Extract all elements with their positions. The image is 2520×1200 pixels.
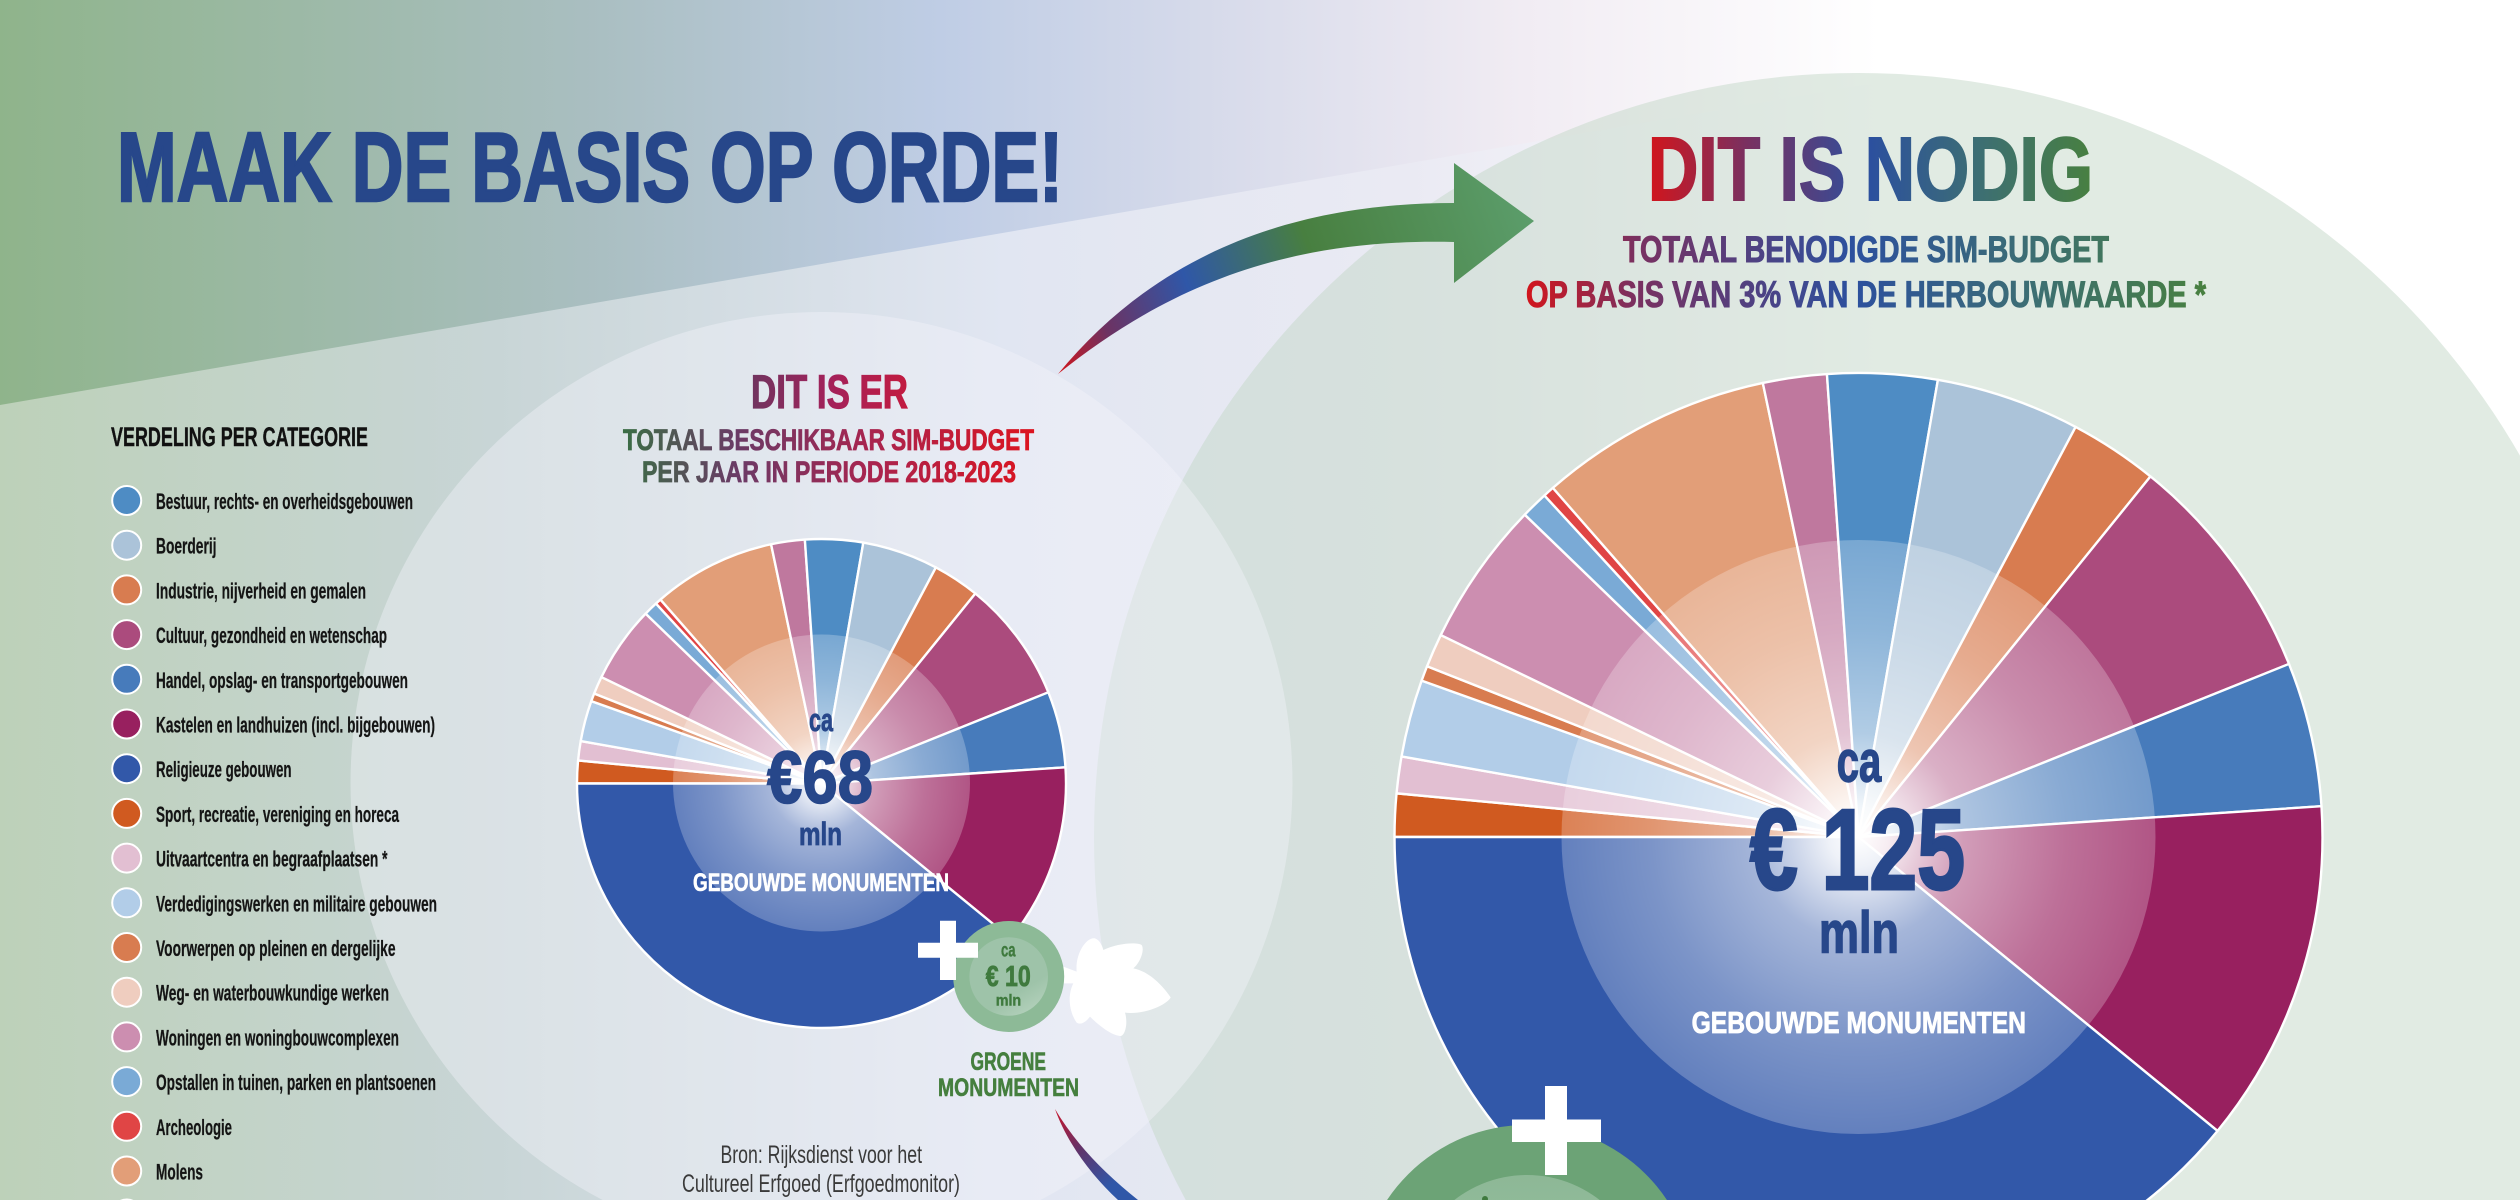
source note: Cultureel Erfgoed (Erfgoedmonitor) [682,1170,960,1198]
legend item: industrie [112,575,366,604]
slice: boerderij [822,543,936,784]
legend item: opstallen: Opstallen in tuinen, parken en plantsoenen [156,1070,436,1095]
background: top-left diagonal banner [0,0,2360,405]
slice: handel [822,692,1065,784]
legend item: molens: Molens [156,1160,203,1184]
pie label: gebouwde monumenten small: GEBOUWDE MONUMENTEN [693,869,949,897]
slice: handel [1858,664,2321,837]
slice: kastelen [1858,806,2322,1131]
slice: woningen [601,614,822,784]
legend item: sport: Sport, recreatie, vereniging en horeca [156,802,399,827]
pie glow: large [1562,540,2156,1134]
pie total: ca 125 mln: ca [1837,730,1882,795]
pie total: ca 68 mln: mln [799,816,842,852]
pie total: ca 125 mln: mln [1819,901,1899,966]
slice: voorwerpen [591,693,822,784]
background circle: dit is nodig [1094,73,2520,1200]
green monuments badge: small: ca [1001,941,1016,962]
slice: uitvaart [1397,756,1858,837]
slice: weg- en waterbouw [594,677,822,784]
slice: molens [1553,383,1858,837]
slice: cultuur [1858,476,2289,837]
green monuments badge: small [953,921,1064,1032]
legend item: molens [112,1156,203,1186]
icon: white leaf [1062,938,1171,1036]
legend item: boerderij [112,531,216,560]
slice: opstallen [646,604,822,784]
pie total: ca 125 mln [1750,730,1965,966]
slice: archeologie [656,600,822,784]
label: groene monumenten: GROENE [970,1048,1046,1076]
pie chart: large, dit is nodig [1394,373,2322,1200]
slice: industrie [1858,427,2150,837]
slice: kastelen [822,767,1066,938]
slice: voorwerpen [1422,666,1858,837]
legend item: voorwerpen: Voorwerpen op pleinen en dergelijke [156,936,396,961]
label: groene monumenten [938,1048,1079,1102]
legend item: uitvaartcentra [112,844,388,873]
source note [682,1141,960,1198]
legend item: handel [112,665,408,694]
legend item: verdedigingswerken [112,888,437,917]
slice: verdedigingswerken [1402,681,1858,837]
green monuments badge: small: mln [996,992,1021,1009]
legend item: archeologie [112,1112,232,1141]
pie glow: small [673,634,970,932]
pie total: ca 68 mln [767,702,873,852]
slice: archeologie [1544,488,1858,837]
slice: sport [577,760,822,784]
slice: molens [660,544,822,784]
legend item: kastelen [112,710,435,738]
legend item: industrie: Industrie, nijverheid en gemalen [156,578,366,603]
legend item: archeologie: Archeologie [156,1115,232,1140]
legend item: cultuur: Cultuur, gezondheid en wetenschap [156,623,387,648]
green monuments badge: small: € 10 [986,961,1031,993]
slice: woningen [1441,515,1858,837]
slice: sport [1394,793,1858,837]
legend [111,422,437,1200]
legend item: kastelen: Kastelen en landhuizen (incl. bijgebouwen) [156,712,435,738]
background circle: dit is er [350,312,1292,1200]
legend item: woningen [112,1022,399,1051]
subheading: totaal benodigde sim-budget: TOTAAL BENODIGDE SIM-BUDGET [1623,229,2109,270]
legend item: weg- en waterbouw: Weg- en waterbouwkundige werken [156,981,389,1006]
label: groene monumenten: MONUMENTEN [938,1074,1079,1102]
slice: religieuze gebouwen [1394,837,2218,1200]
legend item: cultuur [112,620,387,649]
pie total: ca 68 mln: ca [809,702,833,738]
legend item: woningen: Woningen en woningbouwcomplexen [156,1025,399,1050]
subheading: op basis van 3%: OP BASIS VAN 3% VAN DE HERBOUWWAARDE * [1526,274,2206,315]
legend item: handel: Handel, opslag- en transportgebouwen [156,668,408,693]
legend item: sport [112,799,399,828]
slice: religieuze gebouwen [577,784,1011,1028]
slice: weg- en waterbouw [1427,635,1858,837]
slice: uitvaart [578,741,822,784]
subheading: per jaar in periode: PER JAAR IN PERIODE 2018-2023 [642,456,1016,489]
pie chart: small, dit is er [577,539,1066,1028]
slice: verdedigingswerken [581,701,822,784]
legend item: weg- en waterbouw [112,978,389,1007]
slice: boerderij [1858,380,2076,837]
arrow: lower curved arrow [1055,1109,1138,1200]
slice: bestuur [805,539,863,784]
slice: overig [771,540,822,784]
source note: Bron: Rijksdienst voor het [720,1141,922,1169]
arrow: from dit is er to dit is nodig [1058,163,1534,374]
plus sign: small [918,921,978,980]
pie total: ca 125 mln: € 125 [1750,787,1965,914]
slice: overig [1763,374,1858,837]
heading: dit is er: DIT IS ER [751,365,908,418]
legend item: voorwerpen [112,933,395,962]
slice: bestuur [1827,373,1938,837]
legend item: bestuur: Bestuur, rechts- en overheidsgebouwen [156,489,413,514]
legend item: bestuur [112,486,413,515]
legend item: opstallen [112,1067,436,1096]
legend swatch: cropped last item [112,1200,141,1201]
legend item: uitvaartcentra: Uitvaartcentra en begraafplaatsen * [156,847,388,872]
subheading: totaal beschikbaar sim-budget: TOTAAL BESCHIKBAAR SIM-BUDGET [623,424,1034,457]
legend item: religieuze gebouwen [112,754,292,783]
slice: opstallen [1525,495,1858,837]
legend item: verdedigingswerken: Verdedigingswerken en militaire gebouwen [156,891,437,916]
legend item: boerderij: Boerderij [156,534,216,559]
legend title: VERDELING PER CATEGORIE [111,422,368,452]
slice: industrie [822,567,975,784]
legend item: religieuze gebouwen: Religieuze gebouwen [156,757,292,782]
slice: cultuur [822,593,1048,784]
green monuments badge: large [1359,1125,1695,1200]
title: MAAK DE BASIS OP ORDE! [117,112,1063,222]
plus sign: large [1512,1086,1601,1175]
pie total: ca 68 mln: €68 [767,736,873,819]
heading: dit is nodig: DIT IS NODIG [1648,120,2093,220]
pie label: gebouwde monumenten large: GEBOUWDE MONUMENTEN [1692,1005,2026,1040]
